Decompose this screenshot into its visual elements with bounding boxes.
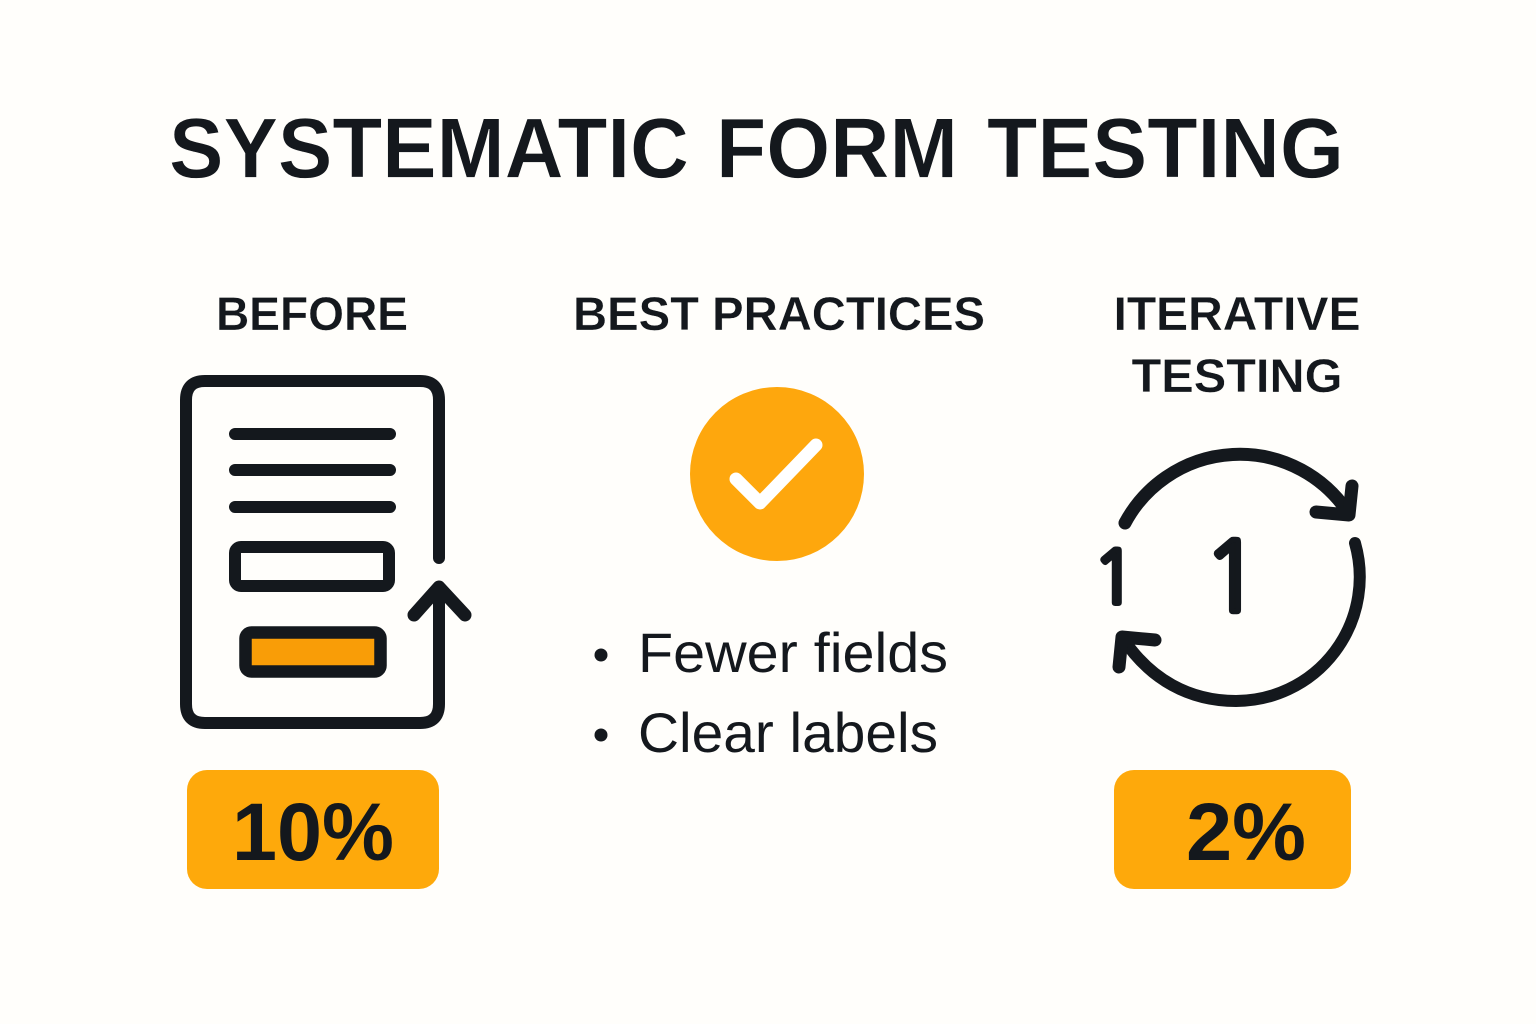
icon: form document with arrow bbox=[186, 381, 465, 723]
bullet list bbox=[594, 621, 948, 764]
title: TESTING bbox=[987, 102, 1344, 196]
panel: iterative testing bbox=[1092, 287, 1360, 889]
title bbox=[169, 102, 1344, 196]
heading: iterative testing: ITERATIVE bbox=[1114, 287, 1360, 340]
heading: best practices: BEST PRACTICES bbox=[573, 287, 985, 340]
icon: check circle bbox=[690, 387, 864, 561]
badge: 2% bbox=[1114, 770, 1351, 889]
number: centre 1: 1 bbox=[1203, 529, 1261, 625]
bullet list: Clear labels bbox=[638, 701, 938, 764]
panel: best practices bbox=[573, 287, 985, 764]
title: SYSTEMATIC bbox=[169, 102, 689, 196]
badge: 10% bbox=[187, 770, 439, 889]
heading: iterative testing: TESTING bbox=[1132, 349, 1342, 402]
heading: before: BEFORE bbox=[216, 287, 408, 340]
panel: before bbox=[186, 287, 465, 889]
badge: 2%: 2% bbox=[1186, 787, 1306, 878]
badge: 10%: 10% bbox=[232, 787, 394, 878]
bullet list: Fewer fields bbox=[638, 621, 948, 684]
title: FORM bbox=[716, 102, 958, 196]
number: left 1: 1 bbox=[1092, 542, 1137, 614]
heading: iterative testing bbox=[1114, 287, 1360, 402]
icon: cycle arrows bbox=[1119, 454, 1360, 701]
